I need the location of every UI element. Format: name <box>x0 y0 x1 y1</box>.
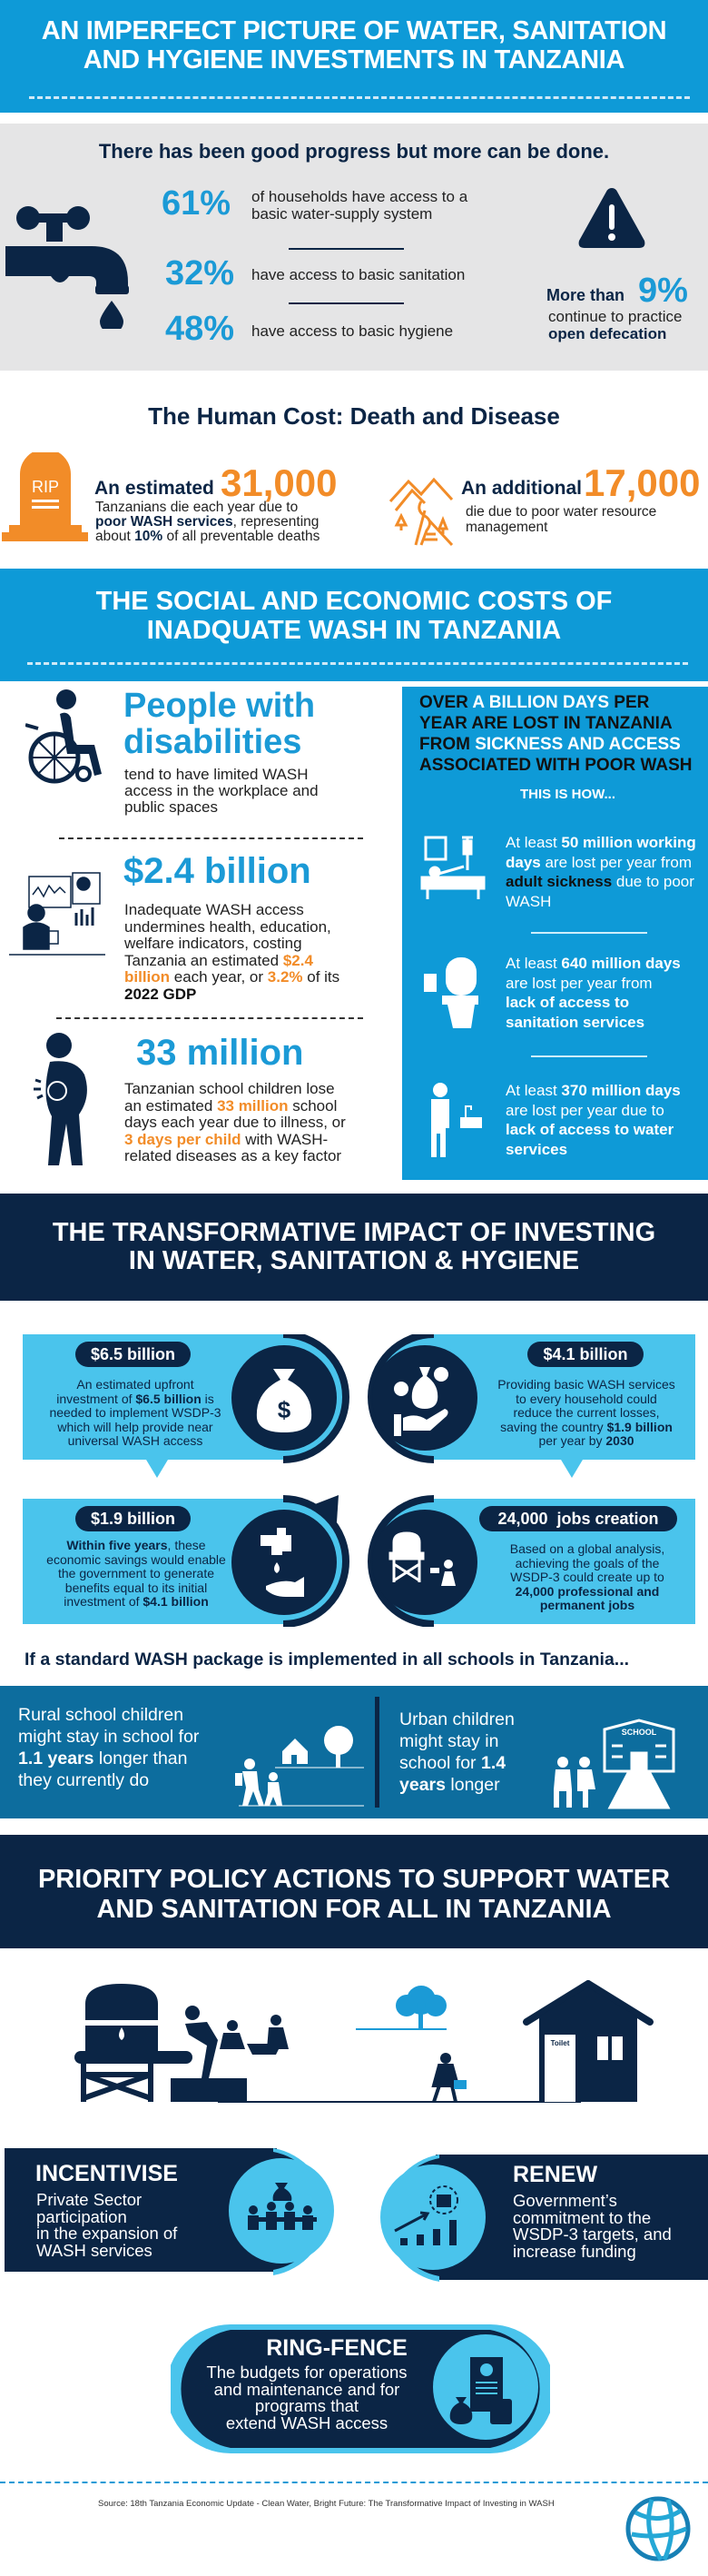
text: achieving the goals of the <box>516 1555 659 1570</box>
text: 640 million days: lack of access to <box>506 994 629 1011</box>
title: THE TRANSFORMATIVE IMPACT OF INVESTING <box>53 1218 655 1247</box>
text <box>513 2193 672 2260</box>
title <box>38 1865 670 1924</box>
text: 640 million days: sanitation services <box>506 1014 644 1030</box>
heading: INCENTIVISE <box>35 2161 178 2186</box>
text: rural: they currently do <box>18 1770 149 1790</box>
icon: World Bank globe logo <box>624 2494 692 2563</box>
text: 50 million working days: WASH <box>506 892 551 910</box>
title: AN IMPERFECT PICTURE OF WATER, SANITATION <box>42 16 666 45</box>
text: participation <box>36 2207 127 2225</box>
title: AND HYGIENE INVESTMENTS IN TANZANIA <box>84 45 624 74</box>
text: urban <box>399 1709 515 1795</box>
text: programs that <box>255 2396 359 2415</box>
text block: $2.4 billion <box>123 851 339 1003</box>
icon: tap <box>5 206 129 329</box>
stat: 17,000: die due to poor water resource <box>466 504 656 520</box>
title: PRIORITY POLICY ACTIONS TO SUPPORT WATER <box>38 1865 670 1894</box>
icon: sick child <box>34 1033 87 1165</box>
icon: toilet <box>424 957 478 1028</box>
text: per year by 2030 <box>538 1433 634 1448</box>
text: rural: Rural school children <box>18 1705 183 1725</box>
text: permanent jobs <box>540 1598 634 1612</box>
label pill: $4.1 billion <box>543 1345 628 1363</box>
text block: 33 million: an estimated 33 million school <box>124 1097 337 1114</box>
header: social and economic costs <box>0 569 708 681</box>
text: 370 million days: are lost per year due to <box>506 1101 664 1119</box>
icon: analyst with charts <box>9 872 105 956</box>
text block: $2.4 billion: billion each year, or 3.2% of its <box>124 968 339 986</box>
text: Providing basic WASH services <box>497 1377 675 1392</box>
label pill <box>479 1506 677 1531</box>
text: 370 million days: At least 370 million days <box>506 1082 681 1099</box>
text: 640 million days: are lost per year from <box>506 974 653 992</box>
card: $6.5 billion <box>23 1334 349 1478</box>
stat: 32% <box>165 254 465 292</box>
icon: school building <box>554 1719 675 1809</box>
text: 370 million days: lack of access to water <box>506 1121 674 1138</box>
heading: FROM SICKNESS AND ACCESS <box>419 735 681 754</box>
text block: people with disabilities: access in the workplace and <box>124 782 319 799</box>
text: urban: school for 1.4 <box>399 1753 506 1773</box>
text block: $2.4 billion: 2022 GDP <box>124 985 196 1003</box>
stat: 32%: have access to basic sanitation <box>251 266 465 283</box>
heading: schools: If a standard WASH package is implemented in all schools in Tanzania... <box>25 1650 629 1669</box>
icon: RIP tombstone: RIP <box>32 478 59 496</box>
stat: 32%: 32% <box>165 254 234 292</box>
card: $1.9 billion <box>23 1495 349 1627</box>
text: saving the country $1.9 billion <box>500 1419 673 1433</box>
icon: mountains <box>389 478 453 546</box>
stat: open defecation: open defecation <box>548 325 666 342</box>
stat: open defecation <box>546 272 688 342</box>
text: WASH services <box>36 2240 152 2260</box>
text: rural: 1.1 years longer than <box>18 1749 187 1769</box>
stat: open defecation: More than <box>546 286 624 304</box>
subtitle: There has been good progress but more can be done. <box>99 140 609 163</box>
text: needed to implement WSDP-3 <box>49 1405 221 1420</box>
title <box>53 1218 655 1275</box>
text: commitment to the <box>513 2207 651 2227</box>
heading: RING-FENCE <box>266 2335 408 2361</box>
title <box>42 16 666 74</box>
text <box>189 2364 425 2432</box>
heading: ASSOCIATED WITH POOR WASH <box>419 756 692 775</box>
text: rural <box>18 1705 200 1790</box>
heading: RENEW <box>513 2162 597 2187</box>
text: 370 million days <box>506 1082 681 1157</box>
text block: 33 million: 33 million <box>136 1033 303 1073</box>
text: An estimated upfront <box>76 1377 194 1392</box>
text block: people with disabilities: disabilities <box>123 723 301 761</box>
text block: people with disabilities: public spaces <box>124 798 218 816</box>
panel: billion days lost <box>402 687 708 1180</box>
stat: 17,000: 17,000 <box>584 461 700 504</box>
text block: $2.4 billion: $2.4 billion <box>123 851 311 891</box>
stat: 31,000 deaths: about 10% of all preventable deaths <box>95 529 320 544</box>
stat: open defecation: continue to practice <box>548 308 682 325</box>
stat: 31,000 deaths <box>94 461 337 544</box>
subheading: THIS IS HOW... <box>520 787 615 802</box>
label pill: 24,000 jobs creation <box>497 1510 659 1528</box>
text block: $2.4 billion: undermines health, education, <box>124 917 331 936</box>
icon: hospital bed <box>421 836 485 899</box>
label pill <box>75 1342 191 1367</box>
panel: incentivise <box>5 2148 345 2278</box>
text block: $2.4 billion: Inadequate WASH access <box>124 901 304 918</box>
text: increase funding <box>513 2242 636 2260</box>
label pill <box>75 1506 191 1531</box>
icon: rural children walking <box>235 1726 364 1806</box>
card: $6.5 billion: $ <box>278 1396 291 1423</box>
label pill: $1.9 billion <box>91 1510 175 1528</box>
text: urban: Urban children <box>399 1709 515 1729</box>
text: in the expansion of <box>36 2224 177 2243</box>
text: reduce the current losses, <box>513 1405 660 1420</box>
text: 50 million working days: days are lost per year from <box>506 854 692 870</box>
panel: school outcomes <box>0 1686 708 1818</box>
text block: people with disabilities: People with <box>123 687 315 725</box>
icon: RIP tombstone <box>2 452 88 541</box>
text: universal WASH access <box>68 1433 202 1448</box>
title: IN WATER, SANITATION & HYGIENE <box>129 1246 579 1275</box>
text: 640 million days: At least 640 million days <box>506 955 681 972</box>
text <box>36 2192 177 2259</box>
label pill <box>527 1342 644 1367</box>
icon: school building: SCHOOL <box>622 1728 657 1737</box>
header: priority policy actions <box>0 1835 708 1948</box>
text <box>46 1538 226 1609</box>
stat: 31,000 deaths: 31,000 <box>221 461 337 504</box>
stat: 48%: have access to basic hygiene <box>251 322 453 340</box>
text: Private Sector <box>36 2190 142 2209</box>
text: Within five years, these <box>66 1538 206 1552</box>
stat: 48%: 48% <box>165 310 234 348</box>
stat: 61%: 61% <box>162 184 231 223</box>
text block: 33 million: days each year due to illness, or <box>124 1114 346 1131</box>
stat: 17,000 <box>461 461 700 535</box>
panel: renew <box>368 2155 708 2284</box>
panel: progress (grey) <box>0 124 708 371</box>
label pill: $6.5 billion <box>91 1345 175 1363</box>
title: THE SOCIAL AND ECONOMIC COSTS OF <box>96 587 612 616</box>
text block: $2.4 billion: Tanzania an estimated $2.4 <box>124 952 313 968</box>
stat: 61% <box>162 184 468 223</box>
text: 370 million days: services <box>506 1141 567 1157</box>
stat: 31,000 deaths: An estimated <box>94 478 214 499</box>
stat: 17,000: An additional <box>461 478 582 499</box>
title: INADQUATE WASH IN TANZANIA <box>147 616 561 645</box>
title: AND SANITATION FOR ALL IN TANZANIA <box>96 1895 612 1924</box>
stat: 48% <box>165 310 453 348</box>
illustration: water tank, people, toilet house <box>74 1980 654 2103</box>
text: urban: years longer <box>399 1775 500 1795</box>
title <box>96 587 612 645</box>
card: $4.1 billion <box>368 1334 695 1478</box>
text: extend WASH access <box>226 2413 388 2432</box>
stat: 61%: of households have access to a <box>251 188 467 205</box>
text block: 33 million: 3 days per child with WASH- <box>124 1130 328 1148</box>
source: Source: 18th Tanzania Economic Update - Clean Water, Bright Future: The Transformative Impact of Investing in WASH <box>98 2499 555 2509</box>
text: the government to generate <box>58 1566 214 1580</box>
text: 640 million days <box>506 955 681 1030</box>
heading <box>419 693 692 775</box>
heading: human cost: The Human Cost: Death and Disease <box>148 402 560 430</box>
text block: people with disabilities <box>123 687 319 816</box>
text block: 33 million: Tanzanian school children lose <box>124 1080 335 1097</box>
text block: people with disabilities: tend to have limited WASH <box>124 766 309 783</box>
text block: 33 million: related diseases as a key factor <box>124 1147 341 1164</box>
stat: open defecation: 9% <box>638 272 688 310</box>
stat: 61%: basic water-supply system <box>251 205 432 223</box>
icon: warning <box>579 188 644 248</box>
text: 50 million working days: adult sickness due to poor <box>506 873 694 890</box>
text: 50 million working days <box>506 834 696 910</box>
text: 50 million working days: At least 50 million working <box>506 834 696 851</box>
text <box>510 1541 664 1612</box>
stat: 31,000 deaths: poor WASH services, representing <box>95 514 319 530</box>
text: which will help provide near <box>57 1419 213 1433</box>
illustration: water tank, people, toilet house: Toilet <box>551 2039 570 2047</box>
text: rural: might stay in school for <box>18 1727 199 1747</box>
text: investment of $6.5 billion is <box>56 1392 214 1406</box>
text: economic savings would enable <box>46 1551 226 1566</box>
heading: OVER A BILLION DAYS PER <box>419 693 649 712</box>
card: 24,000 jobs <box>368 1495 695 1627</box>
header: section 1 <box>0 0 708 113</box>
text block: $2.4 billion: welfare indicators, costing <box>124 935 302 952</box>
text block: 33 million <box>124 1033 346 1164</box>
stat: 31,000 deaths: Tanzanians die each year due to <box>95 500 298 515</box>
text: Government’s <box>513 2191 617 2210</box>
text: benefits equal to its initial <box>65 1580 207 1595</box>
text: The budgets for operations <box>206 2363 408 2382</box>
panel: ring-fence <box>171 2324 550 2454</box>
heading: YEAR ARE LOST IN TANZANIA <box>419 714 673 733</box>
text: WSDP-3 could create up to <box>510 1570 664 1584</box>
text: to every household could <box>516 1392 657 1406</box>
header: transformative impact <box>0 1194 708 1301</box>
stat: 17,000: management <box>466 520 547 535</box>
text <box>497 1377 675 1448</box>
text: investment of $4.1 billion <box>64 1594 209 1609</box>
icon: wheelchair <box>25 689 102 783</box>
icon: man at sink <box>431 1083 482 1157</box>
text: urban: might stay in <box>399 1731 498 1751</box>
text: 24,000 professional and <box>516 1584 659 1599</box>
text <box>49 1377 221 1448</box>
text: and maintenance and for <box>214 2380 399 2398</box>
text: WSDP-3 targets, and <box>513 2224 672 2244</box>
text: Based on a global analysis, <box>510 1541 664 1556</box>
